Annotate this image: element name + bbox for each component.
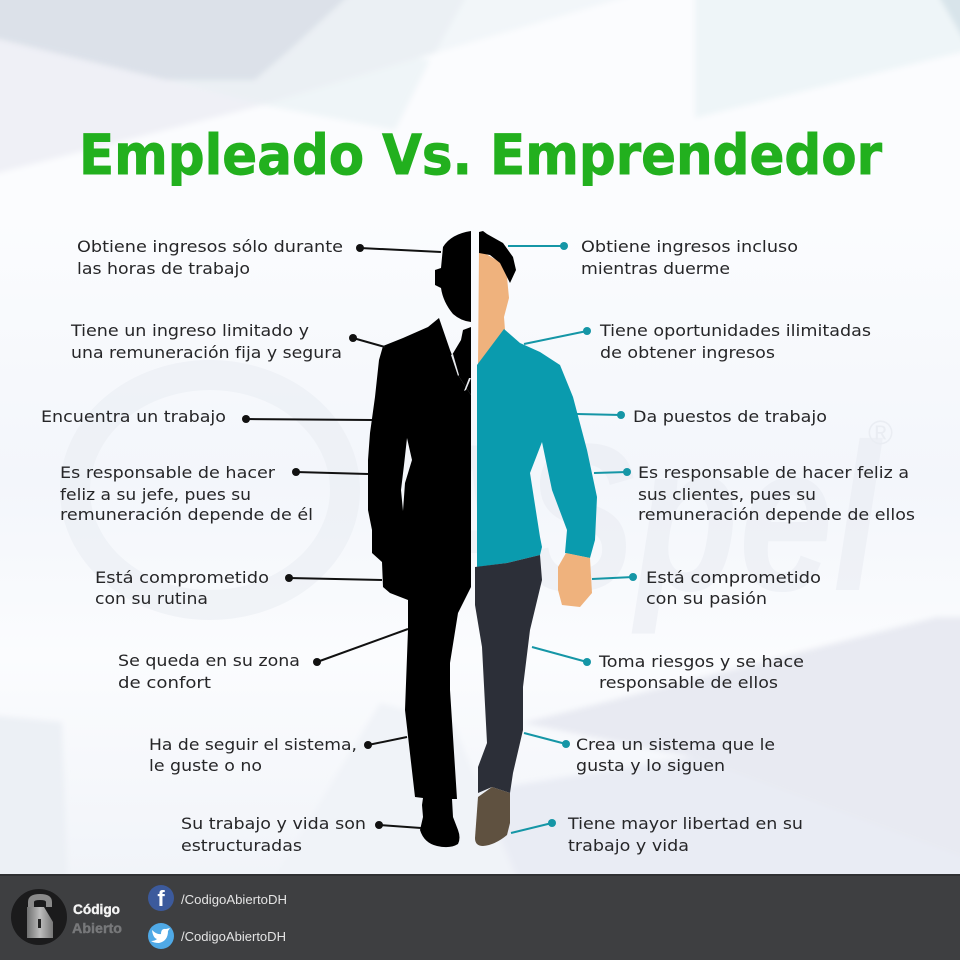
text block: entrepreneur traits: Toma riesgos y se hace: [598, 652, 804, 671]
text block: entrepreneur traits: Da puestos de trabajo: [633, 407, 827, 426]
text block: entrepreneur traits: trabajo y vida: [568, 836, 689, 855]
icon: twitter: [148, 923, 174, 949]
logo text: [72, 902, 122, 936]
text block: employee traits: remuneración depende de él: [60, 505, 313, 524]
text block: employee traits: le guste o no: [149, 756, 262, 775]
text block: employee traits: feliz a su jefe, pues su: [60, 485, 251, 504]
text block: employee traits: Se queda en su zona: [118, 651, 300, 670]
icon: facebook: f: [157, 886, 165, 911]
text block: employee traits: una remuneración fija y segura: [71, 343, 342, 362]
text block: employee traits: Obtiene ingresos sólo durante: [77, 237, 343, 256]
text block: employee traits: Está comprometido: [95, 568, 269, 587]
footer: [0, 874, 960, 960]
text block: employee traits: de confort: [118, 673, 211, 692]
facebook handle: /CodigoAbiertoDH: [181, 892, 287, 907]
text block: entrepreneur traits: gusta y lo siguen: [576, 756, 725, 775]
text block: entrepreneur traits: sus clientes, pues su: [638, 485, 816, 504]
text block: employee traits: Tiene un ingreso limitado y: [70, 321, 309, 340]
title: Empleado Vs. Emprendedor: [79, 123, 882, 187]
text block: employee traits: Encuentra un trabajo: [41, 407, 226, 426]
text block: entrepreneur traits: Tiene oportunidades ilimitadas: [599, 321, 871, 340]
text block: entrepreneur traits: mientras duerme: [581, 259, 730, 278]
panel: central figure: [368, 231, 597, 847]
text block: employee traits: las horas de trabajo: [77, 259, 250, 278]
text block: employee traits: [41, 237, 366, 855]
text block: employee traits: Es responsable de hacer: [60, 463, 275, 482]
text block: entrepreneur traits: de obtener ingresos: [600, 343, 775, 362]
watermark: [75, 375, 893, 635]
connectors: entrepreneur: [508, 242, 637, 833]
logo text: Código: [73, 902, 120, 917]
text block: entrepreneur traits: Obtiene ingresos incluso: [581, 237, 798, 256]
text block: entrepreneur traits: Tiene mayor libertad en su: [567, 814, 803, 833]
figure: employee silhouette: [368, 231, 471, 847]
text block: entrepreneur traits: remuneración depende de ellos: [638, 505, 915, 524]
text block: employee traits: con su rutina: [95, 589, 208, 608]
text block: employee traits: Su trabajo y vida son: [181, 814, 366, 833]
figure: entrepreneur: [475, 231, 597, 846]
logo text: Abierto: [72, 921, 122, 936]
icon: padlock logo: [11, 889, 67, 945]
icon: facebook: [148, 885, 174, 911]
text block: entrepreneur traits: Está comprometido: [646, 568, 821, 587]
text block: entrepreneur traits: responsable de ellos: [599, 673, 778, 692]
twitter handle: /CodigoAbiertoDH: [181, 929, 286, 944]
text block: employee traits: estructuradas: [181, 836, 302, 855]
text block: entrepreneur traits: Es responsable de hacer feliz a: [638, 463, 909, 482]
text block: entrepreneur traits: con su pasión: [646, 589, 767, 608]
text block: entrepreneur traits: Crea un sistema que le: [576, 735, 775, 754]
text block: entrepreneur traits: [567, 237, 915, 855]
watermark: ®: [868, 414, 893, 452]
text block: employee traits: Ha de seguir el sistema,: [149, 735, 357, 754]
connectors: employee: [242, 244, 441, 829]
